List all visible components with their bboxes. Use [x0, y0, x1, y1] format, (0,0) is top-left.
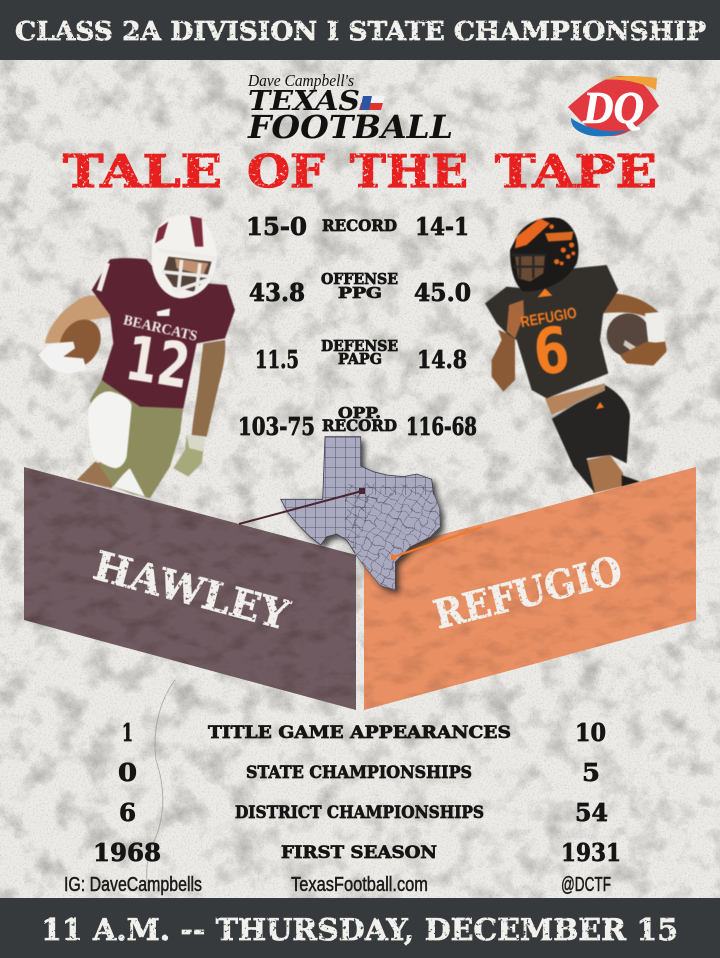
stat row: record: 14-1	[415, 212, 469, 241]
stat row: opponent record: 103-75	[238, 412, 315, 441]
stat row: record: 15-0	[246, 212, 307, 241]
table row: title game appearances: 1	[122, 718, 133, 747]
stat row: opponent record: OPP.	[338, 404, 381, 422]
stat row: record	[246, 212, 469, 241]
stat row: offense ppg: 43.8	[249, 278, 305, 307]
social handles: @DCTF	[561, 874, 611, 896]
player: Refugio #6: REFUGIO	[519, 305, 578, 331]
table row: district championships: 6	[119, 798, 136, 827]
locator line: Refugio	[391, 527, 482, 560]
table row: first season: FIRST SEASON	[281, 843, 437, 863]
logo: Dave Campbell's Texas Football: Dave Campbell's	[247, 71, 354, 90]
stat row: defense papg: PAPG	[338, 350, 382, 368]
title	[63, 145, 657, 198]
stat row: offense ppg: 45.0	[414, 278, 471, 307]
stat row: offense ppg	[249, 270, 471, 307]
title: TAPE	[495, 145, 657, 198]
stat row: opponent record: 116-68	[406, 412, 477, 441]
stat row: offense ppg: OFFENSE	[321, 270, 398, 288]
stat row: defense papg	[255, 337, 467, 374]
stat row: opponent record	[238, 404, 477, 441]
helmet	[510, 218, 578, 292]
player: Refugio #6: 6	[529, 312, 573, 390]
title: THE	[350, 145, 468, 198]
table row: title game appearances	[122, 718, 606, 747]
player: Hawley #12: 12	[121, 322, 195, 403]
bottom banner	[0, 898, 720, 958]
banner title: CLASS 2A DIVISION I STATE CHAMPIONSHIP	[15, 17, 706, 47]
table row: state championships: 0	[118, 758, 137, 787]
player: Refugio #6	[485, 218, 667, 493]
team name: Refugio: REFUGIO	[429, 548, 627, 639]
social handles	[64, 874, 611, 896]
Texas flag	[359, 96, 385, 110]
table row: district championships	[119, 798, 608, 827]
stat row: offense ppg: PPG	[338, 284, 382, 302]
table row: district championships: 54	[575, 798, 608, 827]
stat row: defense papg: 11.5	[255, 345, 299, 374]
locator line: Hawley	[239, 488, 365, 524]
table row: district championships: DISTRICT CHAMPIONSHIPS	[235, 803, 484, 823]
helmet	[152, 215, 217, 298]
player: Hawley #12: BEARCATS	[122, 312, 199, 345]
table row: title game appearances: 10	[575, 718, 606, 747]
social handles: TexasFootball.com	[291, 874, 428, 896]
social handles: IG: DaveCampbells	[64, 874, 202, 896]
table row: first season	[93, 838, 621, 867]
map: Texas counties	[239, 436, 482, 597]
stat row: defense papg: 14.8	[417, 345, 467, 374]
stat row: opponent record: RECORD	[322, 416, 397, 435]
table row: state championships: STATE CHAMPIONSHIPS	[246, 763, 472, 783]
table row: state championships	[118, 758, 600, 787]
table row: first season: 1968	[93, 838, 161, 867]
title: TALE	[63, 145, 222, 198]
logo: Dave Campbell's Texas Football	[247, 71, 453, 146]
title: OF	[247, 145, 325, 198]
stat row: record: RECORD	[322, 216, 397, 235]
team name: Hawley: HAWLEY	[88, 542, 294, 640]
top banner	[0, 0, 720, 60]
stat row: defense papg: DEFENSE	[321, 337, 398, 355]
panel: Hawley	[24, 467, 356, 710]
kickoff time: 11 A.M. -- THURSDAY, DECEMBER 15	[41, 913, 678, 948]
logo: Dave Campbell's Texas Football: TEXAS	[248, 86, 360, 117]
logo: Dairy Queen: DQ	[582, 82, 644, 133]
logo: Dave Campbell's Texas Football: FOOTBALL	[247, 108, 453, 146]
table row: first season: 1931	[561, 838, 621, 867]
logo: Dairy Queen	[568, 76, 659, 136]
table row: state championships: 5	[582, 758, 600, 787]
panel: Refugio	[364, 467, 696, 710]
player: Hawley #12	[38, 215, 235, 498]
table row: title game appearances: TITLE GAME APPEARANCES	[208, 723, 511, 743]
